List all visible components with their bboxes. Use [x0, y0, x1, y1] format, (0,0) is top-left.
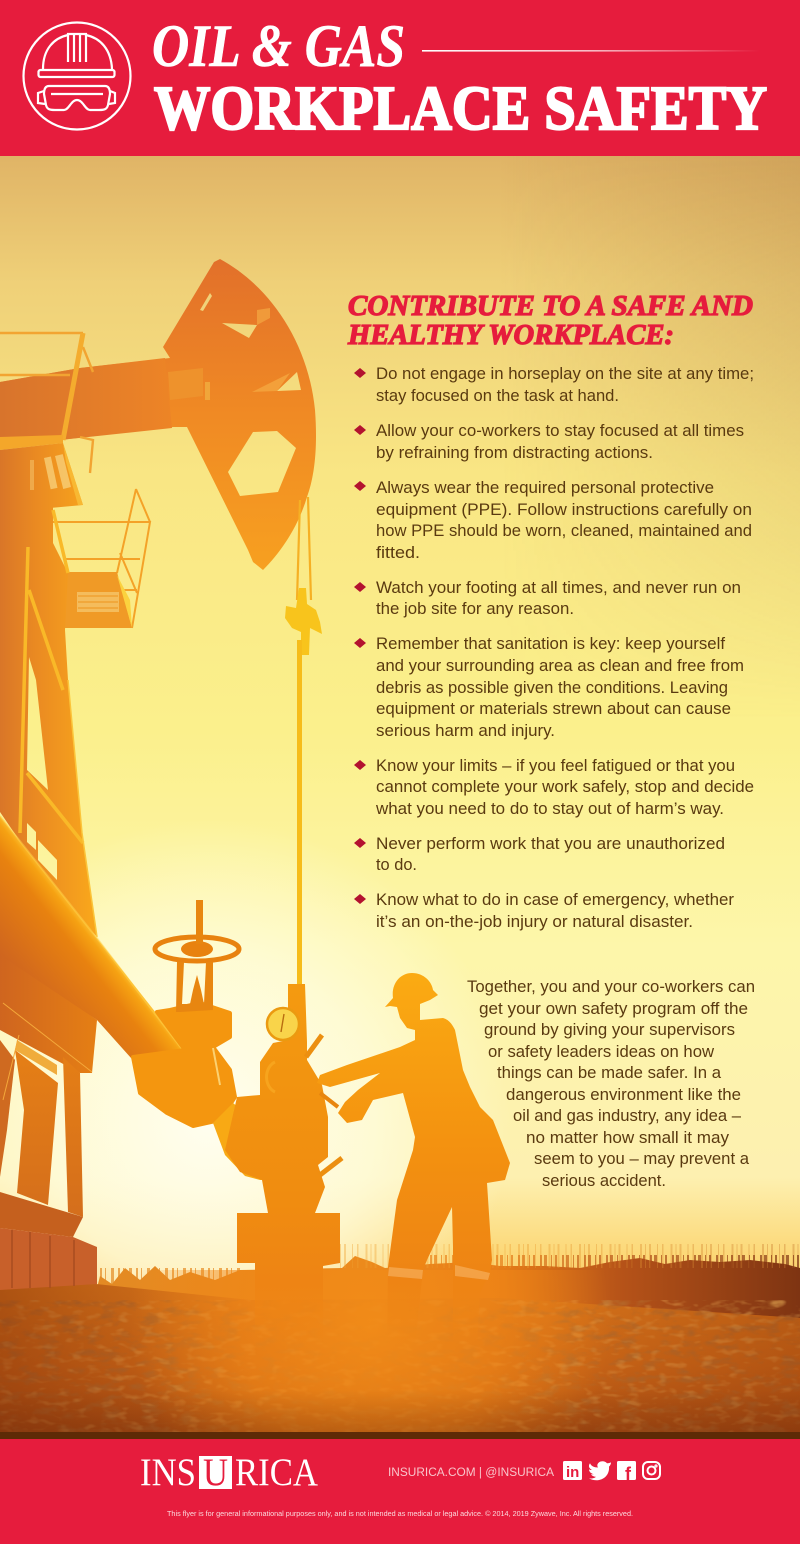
bullet: protective equipment: Always wear the required personal protective: [376, 479, 714, 497]
bullet: protective equipment: fitted.: [376, 544, 420, 562]
pipe support block: [0, 950, 97, 1073]
icon: linkedin: in: [566, 1464, 579, 1481]
logo: Insurica: [140, 1451, 318, 1494]
frame brace: [15, 1040, 57, 1075]
second pipe: [213, 1103, 278, 1180]
title line one: OIL & GAS: [152, 13, 405, 79]
bullet: sanitation: serious harm and injury.: [376, 722, 555, 740]
logo: Insurica: U: [203, 1451, 228, 1494]
website and handle: INSURICA.COM | @INSURICA: [388, 1467, 554, 1479]
boot cuffs: [388, 1265, 490, 1280]
bullet: know your limits: what you need to do to stay out of harm’s way.: [375, 800, 724, 818]
icon: facebook: [617, 1461, 636, 1484]
logo: Insurica: RICA: [235, 1451, 318, 1494]
wellhead with gauge: [225, 984, 342, 1345]
closing paragraph: dangerous environment like the: [506, 1086, 741, 1104]
bullet: unauthorized work: [354, 835, 725, 874]
bridle ropes: [297, 497, 311, 600]
heading: contribute to a safe and healthy workplace: [347, 291, 753, 351]
bullet: sanitation: and your surrounding area as clean and free from: [376, 657, 744, 675]
bullet: footing: the job site for any reason.: [376, 600, 574, 618]
bullet: unauthorized work: Never perform work that you are unauthorized: [376, 835, 725, 853]
tower legs: [0, 505, 97, 937]
bullet: protective equipment: how PPE should be worn, cleaned, maintained and: [376, 522, 752, 540]
bullet: sanitation: equipment or materials strewn about can cause: [376, 700, 731, 718]
lower platform and railing: [53, 489, 150, 628]
bullet: distractions: Allow your co-workers to stay focused at all times: [376, 422, 744, 440]
bullet: distractions: [354, 422, 744, 462]
closing paragraph: seem to you – may prevent a: [534, 1150, 750, 1168]
horizon grass: [97, 1256, 800, 1325]
bullet: footing: Watch your footing at all times, and never run on: [376, 579, 741, 597]
bullet: horseplay: [354, 365, 754, 405]
pump jack silhouette: [0, 259, 322, 985]
bullet: emergency: [354, 891, 735, 931]
icon: twitter: [589, 1461, 611, 1480]
closing paragraph: no matter how small it may: [526, 1129, 730, 1147]
carrier bar: [285, 588, 322, 655]
yellow struts: [20, 510, 83, 843]
closing paragraph: oil and gas industry, any idea –: [513, 1107, 742, 1125]
bullet: protective equipment: [354, 479, 752, 562]
footer band: [0, 1432, 800, 1544]
pressure gauge: [267, 1008, 299, 1040]
main pipe: [0, 816, 190, 1068]
bullet: sanitation: [354, 635, 744, 740]
header band: [0, 0, 800, 156]
icon: instagram: [643, 1462, 660, 1479]
bullet: sanitation: Remember that sanitation is key: keep yourself: [376, 635, 725, 653]
bullet: protective equipment: equipment (PPE). Follow instructions carefully on: [376, 501, 752, 519]
bullet: horseplay: stay focused on the task at hand.: [376, 387, 619, 405]
valve yoke: [176, 962, 213, 1012]
frame legs: [63, 1057, 83, 1217]
bullet: horseplay: Do not engage in horseplay on the site at any time;: [376, 365, 754, 383]
closing paragraph: [467, 978, 755, 1190]
bullet: know your limits: Know your limits – if you feel fatigued or that you: [376, 757, 735, 775]
upper platform and railing: [0, 333, 93, 520]
wrench: [320, 1093, 338, 1107]
title rule: [422, 50, 760, 52]
bullet list: [354, 365, 754, 931]
horsehead and walking beam: [0, 259, 316, 570]
closing paragraph: things can be made safer. In a: [497, 1064, 722, 1082]
head plate highlights: [168, 368, 203, 400]
polished rod: [297, 640, 302, 985]
bullet: know your limits: cannot complete your work safely, stop and decide: [376, 778, 754, 796]
beam: [0, 358, 172, 446]
wooden base: [0, 1228, 97, 1290]
bullet: unauthorized work: to do.: [376, 856, 417, 874]
icon: facebook: f: [625, 1464, 632, 1484]
platform grate: [77, 592, 120, 612]
worker silhouette: [317, 973, 510, 1345]
heading: contribute to a safe and healthy workplace: HEALTHY WORKPLACE:: [347, 320, 674, 351]
closing paragraph: serious accident.: [542, 1172, 666, 1190]
valve wheel: [155, 937, 239, 961]
disclaimer: This flyer is for general informational purposes only, and is not intended as medical or legal advice. © 2014, 2019 Zywave, Inc. All rights reserved.: [167, 1510, 633, 1518]
bullet: footing: [354, 579, 741, 618]
gravel ground: [0, 1270, 800, 1434]
closing paragraph: Together, you and your co-workers can: [467, 978, 755, 996]
logo: Insurica: INS: [140, 1451, 196, 1494]
grass blades: [340, 1244, 800, 1268]
bullet: sanitation: debris as possible given the conditions. Leaving: [376, 679, 728, 697]
bullet: emergency: Know what to do in case of emergency, whether: [376, 891, 735, 909]
closing paragraph: ground by giving your supervisors: [484, 1021, 735, 1039]
closing paragraph: get your own safety program off the: [479, 1000, 748, 1018]
photo background: sunset sky: [0, 156, 800, 1320]
bullet: distractions: by refraining from distracting actions.: [376, 444, 653, 462]
deck grate: [30, 454, 71, 490]
bullet: emergency: it’s an on-the-job injury or natural disaster.: [376, 913, 693, 931]
heading: contribute to a safe and healthy workplace: CONTRIBUTE TO A SAFE AND: [348, 291, 753, 322]
bullet: know your limits: [354, 757, 754, 818]
hard hat, body, arms, legs and bag: [317, 973, 510, 1345]
icon: hard hat and goggles badge: [24, 22, 130, 130]
closing paragraph: or safety leaders ideas on how: [488, 1043, 714, 1061]
frame floor: [0, 1192, 83, 1237]
pipeline and lower frame: [0, 816, 278, 1290]
icon: linkedin: [563, 1461, 582, 1481]
valve flange: [133, 1003, 235, 1126]
